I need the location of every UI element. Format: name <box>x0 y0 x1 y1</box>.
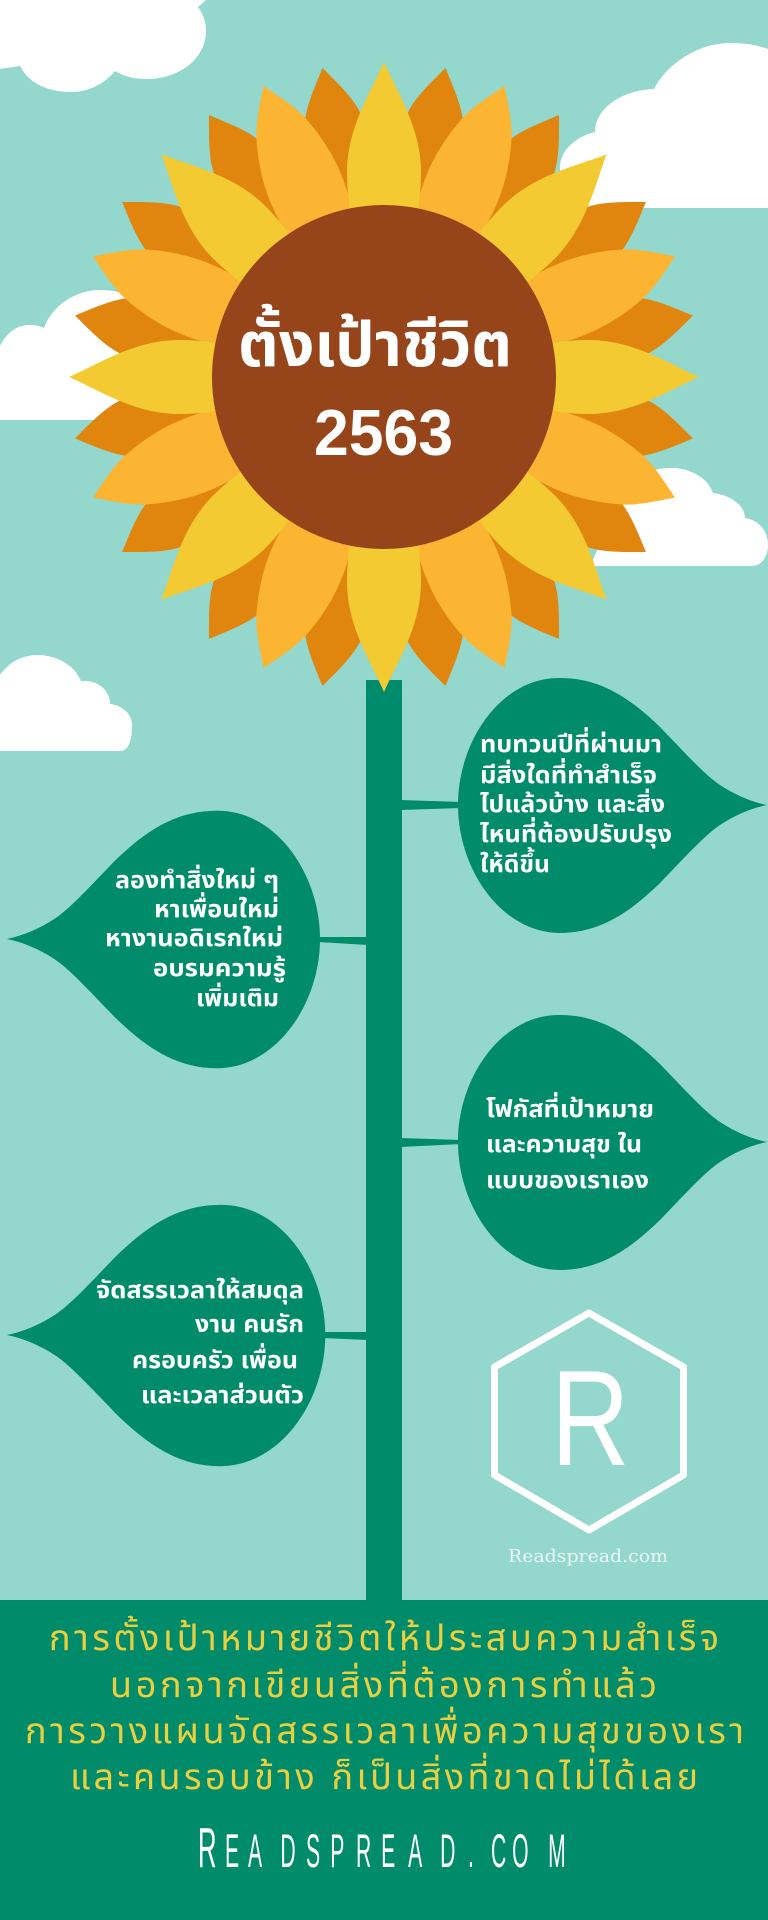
cloud: middle left <box>0 290 170 420</box>
footer site name: R <box>198 1817 217 1880</box>
footer message: การวางแผนจัดสรรเวลาเพื่อความสุขของเรา <box>25 1706 744 1752</box>
leaf: balance time: งาน คนรัก <box>195 1311 304 1338</box>
footer message: และคนรอบข้าง ก็เป็นสิ่งที่ขาดไม่ได้เลย <box>70 1752 698 1797</box>
footer message: การตั้งเป้าหมายชีวิตให้ประสบความสำเร็จ <box>49 1615 719 1658</box>
cloud: middle right <box>590 468 768 566</box>
leaf: try new things: หาเพื่อนใหม่ <box>154 892 279 923</box>
leaf: review past year: มีสิ่งใดที่ทำสำเร็จ <box>480 758 657 789</box>
leaf: balance time <box>7 1205 368 1466</box>
title: ตั้งเป้าชีวิต <box>238 303 512 380</box>
flower centre <box>212 205 556 549</box>
cloud: lower left <box>0 655 132 751</box>
leaf: focus on goals: แบบของเราเอง <box>486 1167 649 1194</box>
footer panel <box>0 1600 768 1920</box>
logo: hexagon R: R <box>551 1344 630 1495</box>
leaf: focus on goals: โฟกัสที่เป้าหมาย <box>486 1092 654 1123</box>
leaf: try new things: หางานอดิเรกใหม่ <box>105 924 283 952</box>
title: 2563 <box>314 396 453 469</box>
cloud: top left <box>0 0 206 92</box>
footer site name: EADSPREAD.COM <box>225 1824 566 1877</box>
leaf: try new things: อบรมความรู้ <box>153 954 286 983</box>
leaf: focus on goals: และความสุข ใน <box>486 1131 642 1159</box>
leaf: review past year: ทบทวนปีที่ผ่านมา <box>480 727 662 758</box>
leaf: review past year: ไปแล้วบ้าง และสิ่ง <box>480 788 665 818</box>
footer message: นอกจากเขียนสิ่งที่ต้องการทำแล้ว <box>110 1660 657 1705</box>
middle petals: gold <box>78 71 690 683</box>
stem <box>366 680 402 1605</box>
cloud: top right <box>560 43 768 208</box>
leaf: try new things: เพิ่มเติม <box>196 982 279 1012</box>
leaf: review past year <box>400 678 767 933</box>
logo: hexagon R <box>494 1313 684 1530</box>
footer message <box>25 1615 744 1797</box>
back petals: orange <box>68 61 700 693</box>
leaf: review past year: ไหนที่ต้องปรับปรุง <box>480 817 672 849</box>
leaf: balance time: และเวลาส่วนตัว <box>141 1381 304 1409</box>
leaf: try new things: ลองทำสิ่งใหม่ ๆ <box>115 864 279 894</box>
leaf: try new things <box>7 811 368 1068</box>
leaf: focus on goals <box>400 1015 767 1270</box>
leaf: review past year: ให้ดีขึ้น <box>480 847 550 878</box>
front petals: yellow <box>69 62 699 692</box>
logo caption: Readspread.com <box>508 1546 668 1567</box>
leaf: balance time: จัดสรรเวลาให้สมดุล <box>96 1276 304 1305</box>
title <box>238 303 512 469</box>
sunflower <box>68 61 700 693</box>
leaf: balance time: ครอบครัว เพื่อน <box>132 1343 298 1374</box>
